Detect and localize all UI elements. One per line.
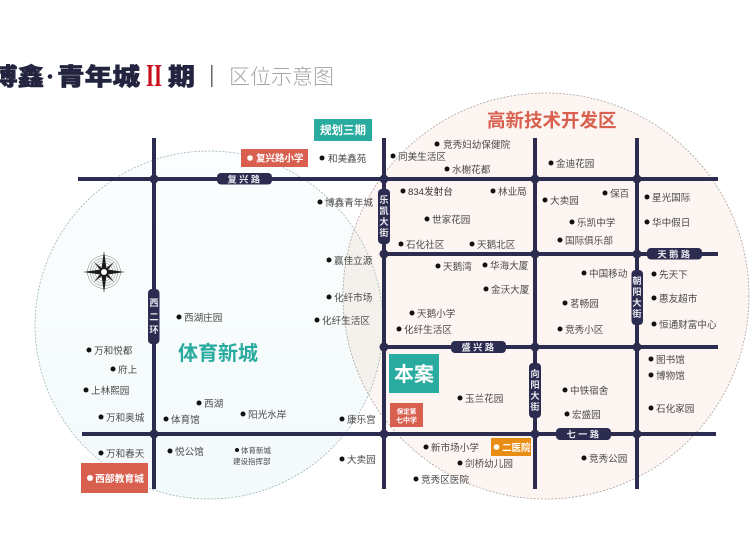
points of interest: 高新技术开发区: 国际俱乐部 xyxy=(565,235,613,247)
points of interest: 体育新城: 西湖 xyxy=(204,399,223,410)
points of interest: 高新技术开发区: 水榭花都 xyxy=(452,164,491,176)
road labels: 复兴路 xyxy=(227,174,263,184)
callout: 保定第七中学: 保定第 xyxy=(397,406,417,416)
points of interest: 体育新城: 府上 xyxy=(118,364,138,376)
callout: 二医院: 二医院 xyxy=(502,442,531,454)
points of interest: 高新技术开发区: 图书馆 xyxy=(656,354,685,366)
points of interest: 高新技术开发区: 竞秀妇幼保健院 xyxy=(443,139,511,151)
points of interest: 体育新城: 大卖园 xyxy=(347,454,376,466)
zone overlap xyxy=(343,230,382,393)
callout: 西部教育城 xyxy=(81,463,148,493)
callout: 规划三期 xyxy=(314,119,372,141)
points of interest: 高新技术开发区: 天鹅小学 xyxy=(417,308,456,320)
road labels: 二 xyxy=(149,312,159,322)
road labels xyxy=(148,173,702,440)
callout: 复兴路小学 xyxy=(241,149,308,167)
road labels: 大 xyxy=(530,390,540,401)
road labels: 向 xyxy=(530,368,540,379)
road labels: 大 xyxy=(379,216,389,227)
points of interest: 高新技术开发区: 剑桥幼儿园 xyxy=(465,458,513,470)
points of interest: 高新技术开发区: 大卖园 xyxy=(550,195,579,207)
callout: 保定第七中学 xyxy=(390,403,423,427)
points of interest: 高新技术开发区 xyxy=(390,139,717,486)
zone: 体育新城 circle xyxy=(35,151,383,499)
points of interest: 体育新城: 化纤生活区 xyxy=(322,315,370,327)
points of interest: 高新技术开发区: 竞秀小区 xyxy=(565,324,604,336)
points of interest: 体育新城: 体育新城 xyxy=(241,445,271,455)
points of interest: 高新技术开发区: 先天下 xyxy=(659,269,688,281)
points of interest: 体育新城: 康乐宫 xyxy=(347,414,376,426)
title: 青年城 xyxy=(57,63,140,91)
points of interest: 体育新城: 万和春天 xyxy=(106,448,145,460)
points of interest: 体育新城: 化纤市场 xyxy=(334,292,373,304)
icon: compass xyxy=(83,251,125,293)
points of interest: 高新技术开发区: 华中假日 xyxy=(652,217,690,229)
points of interest: 高新技术开发区: 中铁宿舍 xyxy=(570,385,609,397)
points of interest: 高新技术开发区: 宏盛园 xyxy=(572,409,601,421)
points of interest: 高新技术开发区: 星光国际 xyxy=(652,192,691,204)
road labels: 街 xyxy=(632,308,642,319)
title: 区位示意图 xyxy=(229,66,334,89)
points of interest: 高新技术开发区: 恒通财富中心 xyxy=(659,319,717,331)
points of interest: 高新技术开发区: 834发射台 xyxy=(408,186,453,198)
road labels: 阳 xyxy=(530,379,540,390)
points of interest: 高新技术开发区: 竞秀区医院 xyxy=(421,474,469,486)
road network xyxy=(78,138,718,489)
title xyxy=(0,57,334,93)
callout: 西部教育城: 西部教育城 xyxy=(95,472,144,485)
road labels: 凯 xyxy=(379,205,389,216)
points of interest: 体育新城 xyxy=(84,153,376,466)
points of interest: 体育新城: 万和悦都 xyxy=(94,345,133,357)
points of interest: 高新技术开发区: 金迪花园 xyxy=(556,158,594,170)
points of interest: 体育新城: 博鑫青年城 xyxy=(325,197,373,209)
points of interest: 体育新城: 体育馆 xyxy=(171,414,200,426)
points of interest: 体育新城: 阳光水岸 xyxy=(248,409,287,421)
points of interest: 高新技术开发区: 世家花园 xyxy=(432,214,470,226)
points of interest: 体育新城: 赢佳立源 xyxy=(334,255,373,267)
points of interest: 体育新城: 西湖庄园 xyxy=(184,312,222,324)
heading: 高新技术开发区: 高新技术开发区 xyxy=(487,110,617,131)
callout: 复兴路小学: 复兴路小学 xyxy=(256,152,304,164)
points of interest: 高新技术开发区: 化纤生活区 xyxy=(404,324,452,336)
road labels: 天鹅路 xyxy=(657,248,693,260)
points of interest: 体育新城: 上林熙园 xyxy=(91,385,129,397)
points of interest: 高新技术开发区: 林业局 xyxy=(498,186,527,198)
road labels: 街 xyxy=(530,401,540,412)
points of interest: 高新技术开发区: 金沃大厦 xyxy=(491,284,530,296)
callout: 规划三期: 规划三期 xyxy=(320,123,366,137)
points of interest: 高新技术开发区: 中国移动 xyxy=(589,268,628,280)
road labels: 盛兴路 xyxy=(461,342,497,352)
title: 期 xyxy=(168,64,195,91)
zone outlines xyxy=(35,93,749,499)
points of interest: 高新技术开发区: 石化家园 xyxy=(656,403,694,415)
points of interest: 高新技术开发区: 茗畅园 xyxy=(570,298,599,310)
points of interest: 高新技术开发区: 乐凯中学 xyxy=(577,217,616,229)
points of interest: 高新技术开发区: 天鹅北区 xyxy=(477,239,516,251)
points of interest: 高新技术开发区: 惠友超市 xyxy=(659,293,698,305)
points of interest: 体育新城: 和美鑫苑 xyxy=(328,153,367,165)
road labels: 西 xyxy=(149,298,159,308)
points of interest: 高新技术开发区: 天鹅湾 xyxy=(443,261,472,273)
points of interest: 高新技术开发区: 竞秀公园 xyxy=(589,453,627,465)
callout: 二医院 xyxy=(491,438,531,456)
points of interest: 高新技术开发区: 玉兰花园 xyxy=(465,393,503,405)
road labels: 乐 xyxy=(379,194,389,205)
callout: 保定第七中学: 七中学 xyxy=(396,416,417,424)
road labels: 环 xyxy=(149,325,159,335)
title: II xyxy=(146,57,162,93)
points of interest: 高新技术开发区: 保百 xyxy=(610,188,629,200)
road labels: 阳 xyxy=(632,286,642,297)
points of interest: 高新技术开发区: 博物馆 xyxy=(656,370,685,382)
points of interest: 高新技术开发区: 石化社区 xyxy=(406,239,445,251)
road labels: 街 xyxy=(379,227,389,238)
road labels: 七一路 xyxy=(566,428,602,440)
points of interest: 高新技术开发区: 新市场小学 xyxy=(431,442,479,454)
callout: 本案 xyxy=(389,354,439,393)
callout: 本案: 本案 xyxy=(394,363,434,386)
points of interest: 高新技术开发区: 同美生活区 xyxy=(398,151,446,163)
points of interest: 高新技术开发区: 华海大厦 xyxy=(490,260,529,272)
points of interest: 体育新城: 建设指挥部 xyxy=(233,456,271,466)
road labels: 大 xyxy=(632,297,642,308)
heading: 体育新城: 体育新城 xyxy=(178,341,258,365)
points of interest: 体育新城: 悦公馆 xyxy=(175,446,204,458)
road labels: 朝 xyxy=(632,275,642,286)
zone: 高新技术开发区 circle xyxy=(343,93,749,499)
points of interest: 体育新城: 万和奥城 xyxy=(106,412,145,424)
